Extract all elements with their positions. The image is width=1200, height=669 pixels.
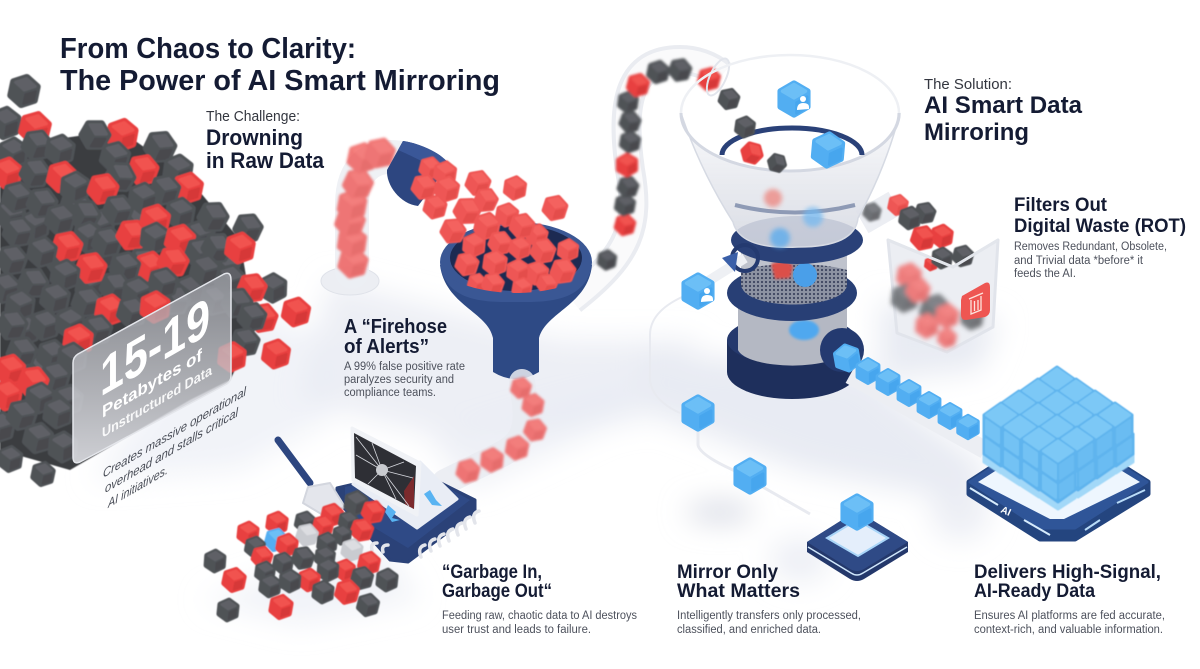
outlet port bbox=[820, 328, 864, 372]
title bbox=[60, 33, 500, 97]
text: filters out digital waste: Filters Out bbox=[1014, 195, 1108, 216]
text: delivers high-signal data: context-rich, and valuable information. bbox=[974, 624, 1163, 636]
angled caption: AI initiatives. bbox=[107, 462, 168, 511]
firehose glass tube bbox=[321, 137, 410, 295]
data pile of grey and red cubes bbox=[0, 75, 309, 486]
clear funnel cone bbox=[681, 113, 900, 247]
heading: the solution: AI Smart Data bbox=[924, 92, 1083, 119]
text: mirror only what matters bbox=[677, 562, 861, 636]
text: firehose of alerts: compliance teams. bbox=[344, 387, 436, 399]
broken AI chip with cracked screen bbox=[278, 428, 479, 562]
glass stat card bbox=[73, 273, 231, 463]
text: firehose of alerts: paralyzes security and bbox=[344, 374, 454, 386]
text: filters out digital waste: feeds the AI. bbox=[1014, 268, 1076, 280]
heading: the challenge: Drowning bbox=[206, 125, 303, 150]
funnel body bbox=[440, 265, 592, 379]
stat label: Unstructured Data bbox=[102, 362, 212, 442]
label: AI: AI bbox=[999, 505, 1013, 519]
top ring bbox=[731, 216, 863, 264]
heading: the challenge: The Challenge: bbox=[206, 108, 300, 125]
blue cube with person bbox=[684, 275, 713, 307]
text: firehose of alerts: A “Firehose bbox=[344, 316, 447, 338]
heading: the solution: The Solution: bbox=[924, 77, 1012, 93]
title: From Chaos to Clarity: bbox=[60, 33, 356, 65]
chip pins bbox=[372, 511, 479, 557]
text: filters out digital waste bbox=[1014, 195, 1186, 280]
middle ring bbox=[727, 265, 857, 321]
heading: the solution: Mirroring bbox=[924, 119, 1029, 146]
upper glass tube into mirror funnel bbox=[572, 55, 734, 300]
navy funnel with red alert cubes bbox=[387, 141, 592, 379]
base bbox=[727, 340, 857, 399]
text: filters out digital waste: Digital Waste (ROT) bbox=[1014, 216, 1186, 237]
angled caption: overhead and stalls critical bbox=[105, 404, 239, 496]
text: mirror only what matters: What Matters bbox=[677, 581, 800, 602]
side outlet bbox=[702, 258, 745, 285]
text: firehose of alerts: of Alerts” bbox=[344, 336, 429, 358]
title: The Power of AI Smart Mirroring bbox=[60, 65, 500, 97]
mirror path with blue cubes bbox=[650, 275, 810, 514]
stat: 15-19: 15-19 bbox=[100, 285, 210, 409]
trash label bbox=[961, 282, 990, 320]
keyboard bbox=[353, 462, 457, 528]
text: garbage in garbage out: Garbage Out“ bbox=[442, 581, 552, 602]
text: mirror only what matters: classified, and enriched data. bbox=[677, 624, 821, 636]
soft floor shadows bbox=[90, 280, 1000, 625]
heading: the challenge bbox=[206, 108, 325, 173]
cubes entering funnel bbox=[719, 88, 788, 174]
text: filters out digital waste: Removes Redundant, Obsolete, bbox=[1014, 241, 1167, 253]
output tube with blue cube row bbox=[834, 344, 985, 450]
text: delivers high-signal data bbox=[974, 562, 1165, 636]
text: garbage in garbage out: “Garbage In, bbox=[442, 562, 542, 583]
cubes dropping in bbox=[888, 194, 973, 271]
text: garbage in garbage out bbox=[442, 562, 637, 636]
trash icon bbox=[969, 293, 983, 314]
small destination platform bbox=[807, 496, 908, 581]
nozzle bbox=[387, 141, 449, 206]
spilled cube pile bbox=[206, 491, 396, 621]
text: delivers high-signal data: Delivers High-Signal, bbox=[974, 562, 1161, 583]
stat label: Petabytes of bbox=[102, 344, 203, 422]
text: mirror only what matters: Intelligently transfers only processed, bbox=[677, 610, 861, 622]
angled caption: Creates massive operational bbox=[103, 383, 247, 481]
heading: the challenge: in Raw Data bbox=[206, 148, 325, 173]
chip body bbox=[337, 470, 475, 562]
text: delivers high-signal data: Ensures AI platforms are fed accurate, bbox=[974, 610, 1165, 622]
lower glass tube to chip bbox=[445, 377, 546, 483]
shovel bbox=[278, 440, 310, 483]
side tube to waste bin bbox=[862, 203, 895, 222]
lower chamber bbox=[738, 306, 847, 366]
red cubes bbox=[411, 156, 577, 298]
AI mirror filter machine bbox=[681, 55, 900, 399]
text: garbage in garbage out: Feeding raw, chaotic data to AI destroys bbox=[442, 610, 637, 622]
AI-ready platform with cube stack bbox=[969, 367, 1148, 539]
text: delivers high-signal data: AI-Ready Data bbox=[974, 581, 1095, 602]
inner navy rim bbox=[722, 128, 862, 155]
cracked screen bbox=[352, 428, 420, 515]
bubble chamber bbox=[741, 250, 847, 305]
text: filters out digital waste: and Trivial data *before* it bbox=[1014, 255, 1144, 267]
text: firehose of alerts: A 99% false positive rate bbox=[344, 361, 465, 373]
text: firehose of alerts bbox=[344, 316, 465, 399]
text: mirror only what matters: Mirror Only bbox=[677, 562, 778, 583]
blue person cube bbox=[780, 83, 809, 115]
blue cube in funnel bbox=[813, 133, 843, 167]
blue splash bbox=[385, 490, 442, 522]
cube stack bbox=[984, 367, 1133, 509]
text: garbage in garbage out: user trust and leads to failure. bbox=[442, 624, 591, 636]
waste bin with trash label bbox=[888, 194, 998, 352]
heading: the solution bbox=[924, 77, 1083, 146]
